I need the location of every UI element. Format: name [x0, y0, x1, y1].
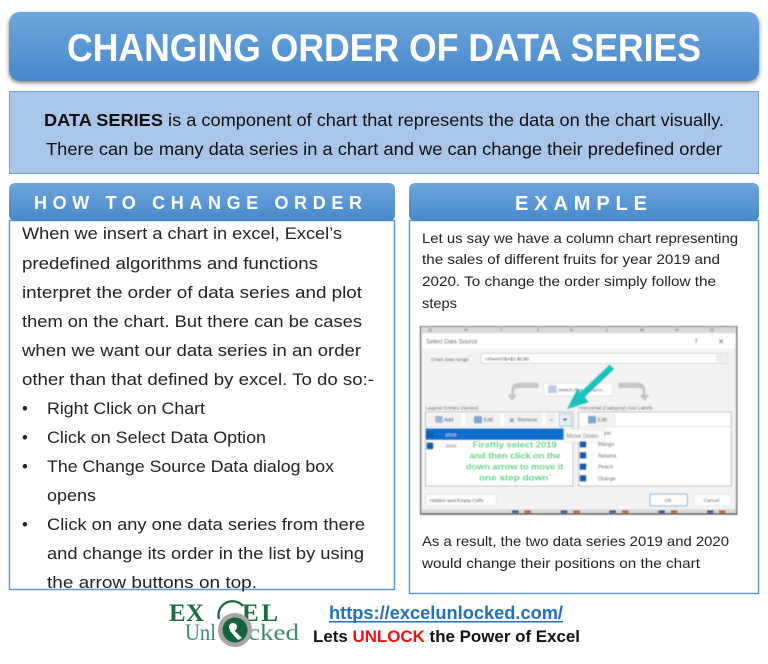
screenshot: select data source dialog: 2019 — [445, 432, 457, 438]
panel: how to change order — [9, 183, 395, 592]
text block: how to steps: opens — [47, 487, 96, 505]
screenshot: select data source dialog: O — [710, 327, 714, 333]
screenshot: select data source dialog: OK — [665, 498, 673, 504]
arrow: teal pointer to move down button — [567, 364, 614, 409]
screenshot: select data source dialog: L — [606, 327, 609, 333]
text block: example result — [421, 533, 729, 571]
screenshot: select data source dialog: ple — [604, 431, 611, 437]
screenshot: select data source dialog: ✕ — [718, 337, 724, 346]
text block: how to steps: When we insert a chart in excel, Excel’s — [22, 225, 342, 243]
screenshot: select data source dialog: Cancel — [704, 498, 719, 504]
screenshot: select data source dialog: Edit — [484, 418, 493, 424]
text block: how to steps: and change its order in the list by using — [47, 545, 364, 563]
screenshot: select data source dialog: K — [570, 327, 574, 333]
screenshot: select data source dialog: Firsttly select 2019 — [473, 440, 557, 450]
text block: how to steps — [21, 225, 374, 592]
text block: how to steps: Click on Select Data Option — [47, 429, 266, 447]
screenshot: select data source dialog: H — [464, 327, 468, 333]
text block: example intro — [422, 230, 738, 311]
screenshot: select data source dialog: Chart data range: — [431, 357, 470, 363]
panel: example — [409, 183, 759, 594]
screenshot: select data source dialog: one step down` — [479, 473, 552, 483]
tagline: Lets UNLOCK the Power of Excel — [313, 628, 580, 646]
logo: excel unlocked — [169, 600, 300, 647]
text block: how to steps: The Change Source Data dialog box — [47, 458, 335, 476]
screenshot: select data source dialog: M — [640, 327, 644, 333]
screenshot: select data source dialog: Switch Row/Column — [558, 388, 603, 394]
screenshot: select data source dialog — [420, 326, 737, 515]
text block: how to steps: • — [22, 516, 28, 534]
text block: how to steps: them on the chart. But there can be cases — [22, 313, 362, 331]
text block: how to steps: other than that defined by excel. To do so:- — [22, 371, 374, 389]
screenshot: select data source dialog: Banana — [598, 453, 616, 459]
screenshot: select data source dialog: Remove — [518, 418, 538, 424]
title banner — [9, 12, 759, 81]
screenshot: select data source dialog: down arrow to move it — [466, 462, 564, 472]
text block: how to steps: • — [22, 458, 28, 476]
text block: how to steps: when we want our data series in an order — [21, 342, 362, 360]
logo: excel unlocked: EL — [242, 600, 278, 627]
screenshot: select data source dialog: Orange — [598, 476, 616, 482]
text block: how to steps: Right Click on Chart — [47, 400, 205, 418]
screenshot: select data source dialog: =Sheet2!$A$1:$C$6 — [484, 357, 529, 363]
link: website url: https://excelunlocked.com/ — [329, 603, 563, 623]
text block: example intro: 2020. To change the order simply follow the — [422, 273, 716, 289]
logo: excel unlocked: Unl — [185, 620, 216, 645]
heading: how to change order — [9, 183, 395, 221]
text block: example result: As a result, the two data series 2019 and 2020 — [422, 533, 729, 549]
screenshot: select data source dialog: G — [428, 327, 432, 333]
text block: how to steps: • — [22, 400, 28, 418]
title banner: CHANGING ORDER OF DATA SERIES — [67, 27, 701, 70]
logo: excel unlocked: EX — [169, 600, 204, 627]
screenshot: select data source dialog: 2020 — [445, 444, 457, 450]
screenshot: select data source dialog: Move Down — [567, 434, 598, 440]
logo: excel unlocked: cked — [248, 620, 300, 645]
screenshot: select data source dialog: and then click on the — [469, 451, 561, 461]
text block: example intro: Let us say we have a column chart representing — [422, 230, 738, 246]
text block: example result: would change their positions on the chart — [421, 555, 700, 571]
text block: how to steps: Click on any one data series from there — [47, 516, 365, 534]
text block: how to steps: the arrow buttons on top. — [47, 574, 257, 592]
screenshot: select data source dialog: Legend Entries (Series) — [426, 405, 478, 411]
screenshot: select data source dialog: Select Data Source — [426, 339, 478, 345]
panel: definition intro: DATA SERIES is a component of chart that represents the data on the chart visually. — [44, 110, 724, 130]
screenshot: select data source dialog: ✕ — [509, 416, 515, 425]
heading: how to change order: HOW TO CHANGE ORDER — [34, 193, 362, 213]
heading: example: EXAMPLE — [515, 193, 647, 215]
screenshot: select data source dialog: I — [501, 327, 502, 333]
heading: example — [409, 183, 759, 221]
text block: how to steps: • — [22, 429, 28, 447]
text block: how to steps: predefined algorithms and functions — [22, 255, 318, 273]
screenshot: select data source dialog: Add — [444, 418, 454, 424]
panel: definition intro: There can be many data series in a chart and we can change their predefined order — [46, 139, 722, 159]
screenshot: select data source dialog: Edit — [598, 418, 607, 424]
screenshot: select data source dialog: Mango — [598, 442, 614, 448]
screenshot: select data source dialog: Hidden and Empty Cells — [430, 498, 484, 504]
screenshot: select data source dialog: Peach — [598, 465, 613, 471]
screenshot: select data source dialog: ? — [694, 339, 698, 345]
screenshot: select data source dialog: J — [537, 327, 540, 333]
text block: example intro: steps — [422, 295, 457, 311]
text block: example intro: the sales of different fruits for year 2019 and — [422, 251, 720, 267]
panel: definition intro — [10, 92, 758, 174]
screenshot: select data source dialog: N — [675, 327, 679, 333]
text block: how to steps: interpret the order of data series and plot — [22, 284, 362, 302]
screenshot: select data source dialog: Horizontal (Category) Axis Labels — [579, 405, 653, 411]
